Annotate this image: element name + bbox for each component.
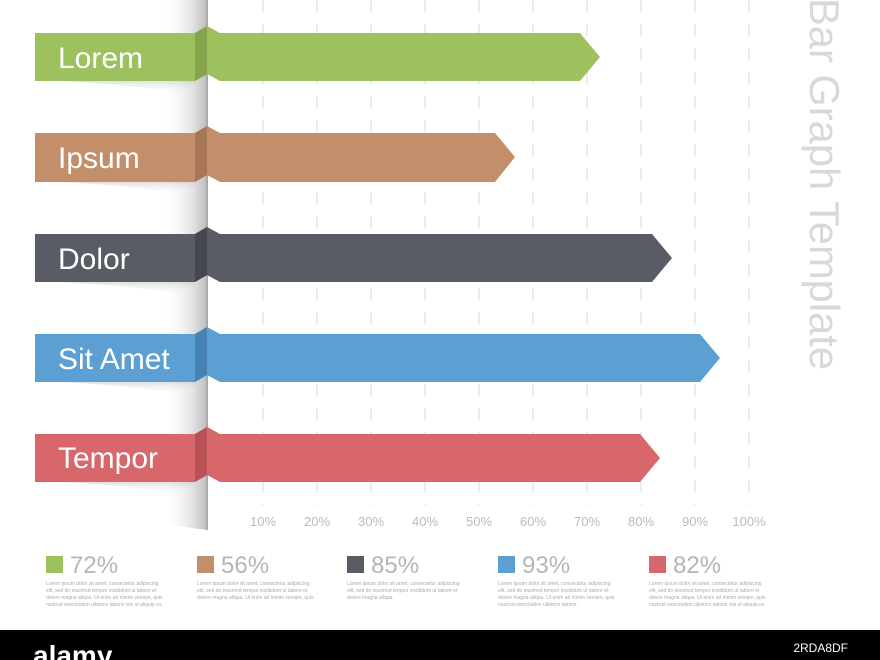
legend: 93% xyxy=(522,552,570,579)
legend descriptions: dolore magna aliqua. Ut enim ad minim veniam, quis xyxy=(498,595,615,601)
axis labels: 50% xyxy=(466,514,492,529)
legend descriptions: Lorem ipsum dolor sit amet, consectetur adipiscing xyxy=(649,581,762,587)
bar: Lorem xyxy=(35,26,600,81)
legend: 72% xyxy=(70,552,118,579)
footer band xyxy=(0,630,880,660)
paper fold edge xyxy=(160,0,207,530)
title: Bar Graph Template xyxy=(801,0,848,370)
legend descriptions: elit, sed do eiusmod tempor incididunt ut labore et xyxy=(649,588,760,594)
axis labels: 10% xyxy=(250,514,276,529)
legend descriptions: elit, sed do eiusmod tempor incididunt ut labore et xyxy=(347,588,458,594)
legend descriptions: nostrud exercitation ullamco laboris nisi ut aliquip ex. xyxy=(46,602,163,608)
legend descriptions: elit, sed do eiusmod tempor incididunt ut labore et xyxy=(46,588,157,594)
legend descriptions: nostrud exercitation ullamco laboris. xyxy=(498,602,578,608)
axis labels: 90% xyxy=(682,514,708,529)
legend descriptions: elit, sed do eiusmod tempor incididunt ut labore et xyxy=(197,588,308,594)
axis labels: 60% xyxy=(520,514,546,529)
axis labels: 70% xyxy=(574,514,600,529)
legend descriptions: Lorem ipsum dolor sit amet, consectetur adipiscing xyxy=(498,581,611,587)
legend descriptions: dolore magna aliqua. Ut enim ad minim veniam, quis. xyxy=(197,595,315,601)
bar: Ipsum: Ipsum xyxy=(58,142,140,175)
footer band: 2RDA8DF xyxy=(793,641,848,655)
axis labels: 20% xyxy=(304,514,330,529)
bar: Lorem: Lorem xyxy=(58,42,143,75)
axis labels: 30% xyxy=(358,514,384,529)
axis labels: 40% xyxy=(412,514,438,529)
label shadows xyxy=(60,81,195,496)
bar: Tempor: Tempor xyxy=(58,442,158,475)
bar: Dolor xyxy=(35,227,672,282)
legend descriptions xyxy=(46,581,766,608)
legend descriptions: Lorem ipsum dolor sit amet, consectetur adipiscing xyxy=(46,581,159,587)
legend: 56% xyxy=(221,552,269,579)
bar: Sit Amet xyxy=(35,327,720,382)
axis labels: 80% xyxy=(628,514,654,529)
axis labels xyxy=(250,514,766,529)
legend: 85% xyxy=(371,552,419,579)
bar: Dolor: Dolor xyxy=(58,243,130,276)
axis labels: 100% xyxy=(732,514,766,529)
bar: Sit Amet: Sit Amet xyxy=(58,343,170,376)
legend descriptions: dolore magna aliqua. Ut enim ad minim veniam, quis xyxy=(649,595,766,601)
bar: Tempor xyxy=(35,427,660,482)
legend descriptions: nostrud exercitation ullamco laboris nisi ut aliquip ex. xyxy=(649,602,766,608)
legend xyxy=(46,552,721,579)
legend descriptions: Lorem ipsum dolor sit amet, consectetur adipiscing xyxy=(197,581,310,587)
legend descriptions: dolore magna aliqua. Ut enim ad minim veniam, quis xyxy=(46,595,163,601)
grid lines xyxy=(263,0,749,505)
bar: Ipsum xyxy=(35,126,515,182)
legend descriptions: dolore magna aliqua. xyxy=(347,595,394,601)
legend descriptions: Lorem ipsum dolor sit amet, consectetur adipiscing xyxy=(347,581,460,587)
legend: 82% xyxy=(673,552,721,579)
legend descriptions: elit, sed do eiusmod tempor incididunt ut labore et xyxy=(498,588,609,594)
